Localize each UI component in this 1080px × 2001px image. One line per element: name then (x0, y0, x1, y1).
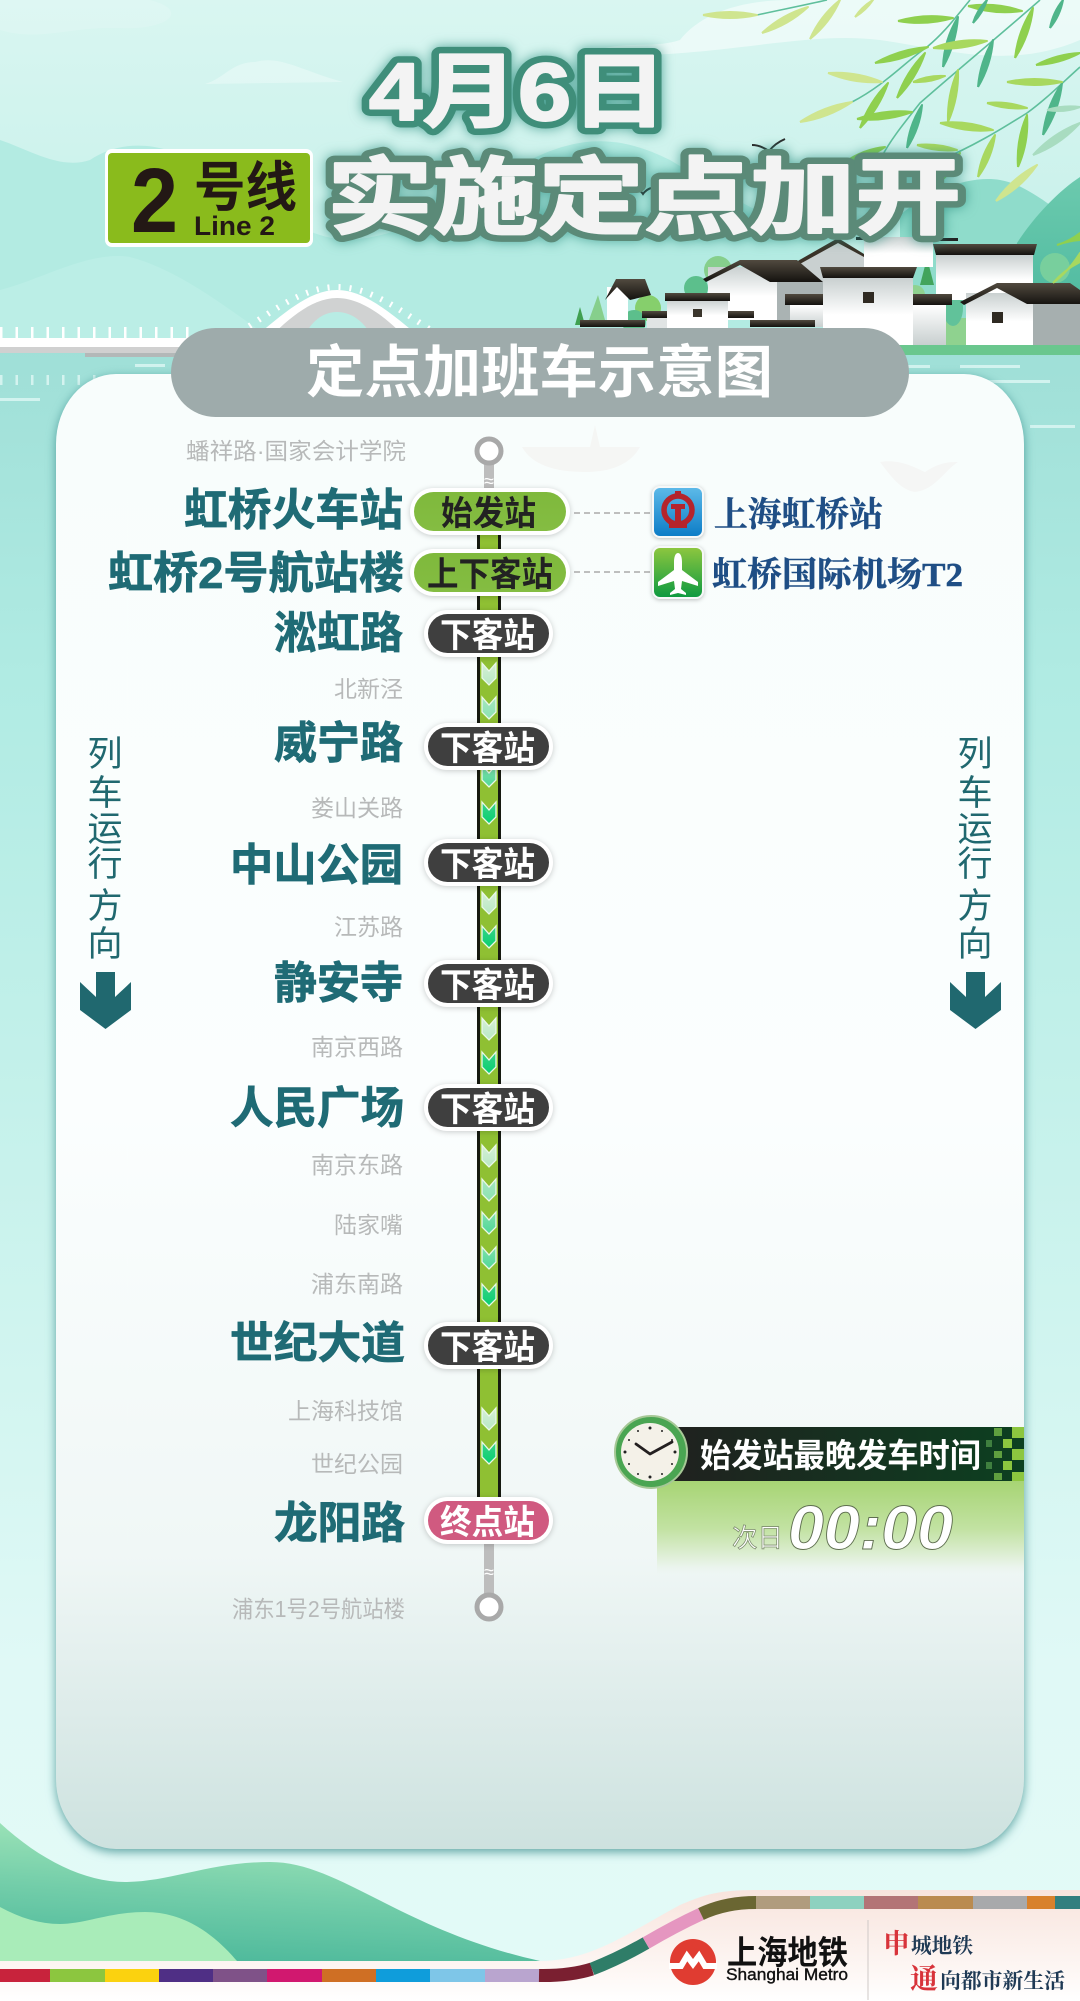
express station names: 虹桥火车站 (184, 486, 403, 535)
express station names: 威宁路 (274, 719, 403, 768)
background sky (0, 0, 1080, 345)
small station names: 北新泾 (334, 676, 403, 702)
pill: terminal: 终点站 (440, 1504, 535, 1542)
direction label left: 列 (87, 735, 123, 774)
last departure time panel (615, 1416, 1024, 1577)
background mountains (0, 140, 1080, 345)
metro line colour strip (0, 1902, 1080, 1976)
bridge (0, 287, 434, 357)
line 2 badge (105, 149, 313, 252)
dashed connectors (574, 513, 652, 572)
pill: alighting 1 (424, 610, 553, 657)
route line (477, 460, 501, 1598)
pill: alighting 3 (424, 839, 553, 886)
footer divider (867, 1920, 869, 2000)
express station names: 静安寺 (274, 959, 403, 1008)
faint boat and swallow (522, 425, 958, 492)
small station names: 南京西路 (311, 1034, 403, 1060)
route line: ≈ (484, 471, 494, 491)
express station names: 龙阳路 (274, 1499, 405, 1548)
express station names: 人民广场 (230, 1084, 404, 1133)
express station names (108, 486, 405, 1548)
pill: alighting 6 (424, 1322, 553, 1369)
panel heading: 始发站最晚发车时间 (700, 1437, 981, 1474)
background clouds (0, 0, 1080, 84)
direction label left: 向 (87, 925, 123, 964)
shanghai metro logo (669, 1934, 848, 1985)
pill: alighting 4: 下客站 (440, 967, 535, 1005)
footer band (0, 1890, 1080, 2001)
line 2 badge: 号线 (194, 158, 297, 218)
direction label left: 方 (87, 887, 123, 926)
title: subtitle: 实施定点加开 (327, 151, 961, 245)
pill: alighting 4 (424, 960, 553, 1007)
terminal ring top (477, 439, 501, 463)
direction label right: 向 (957, 925, 993, 964)
icon: airport (652, 546, 704, 599)
small station names: 浦东1号2号航站楼 (232, 1596, 405, 1622)
direction label right: 运 (957, 810, 993, 849)
time value: 00:00 (788, 1494, 953, 1563)
village houses (575, 230, 1080, 355)
direction label left: 行 (87, 845, 123, 884)
clock (615, 1416, 687, 1488)
water ripples (0, 364, 1075, 428)
small station names: 浦东南路 (311, 1271, 403, 1297)
pill: boarding and alighting: 上下客站 (427, 556, 553, 594)
pill: alighting 2 (424, 723, 553, 770)
direction label right: 方 (957, 887, 993, 926)
express station names: 中山公园 (230, 841, 403, 890)
title: date: 4月6日 (369, 47, 667, 138)
footer slogan: 城地铁 (911, 1934, 973, 1958)
direction label left (80, 735, 131, 1029)
footer slogan (883, 1929, 1065, 1995)
footer slogan: 申 (883, 1929, 910, 1959)
transfer label railway: 上海虹桥站 (714, 496, 883, 534)
direction label left: 车 (87, 774, 123, 813)
pill: alighting 5 (424, 1084, 553, 1131)
small station names: 南京东路 (311, 1152, 403, 1178)
header pill: 定点加班车示意图 (306, 341, 773, 405)
pill: alighting 3: 下客站 (440, 846, 535, 884)
footer slogan: 向都市新生活 (940, 1969, 1065, 1993)
route line: ≈ (484, 1562, 494, 1582)
pill: terminal (424, 1497, 553, 1544)
footer slogan: 通 (910, 1963, 938, 1995)
direction chevrons (482, 663, 496, 1464)
shanghai metro logo: 上海地铁 (727, 1934, 848, 1971)
line 2 badge: 2 (131, 150, 178, 252)
pill: alighting 1: 下客站 (440, 617, 535, 655)
direction label right: 车 (957, 774, 993, 813)
main panel (56, 374, 1024, 1849)
header pill (171, 328, 909, 417)
small station names: 世纪公园 (311, 1451, 403, 1477)
small station names: 娄山关路 (311, 795, 403, 821)
transfer label airport: 虹桥国际机场T2 (712, 556, 963, 594)
pill: departure (410, 488, 570, 535)
title: date: 4月6日 (369, 47, 667, 138)
small station names: 上海科技馆 (288, 1398, 403, 1424)
express station names: 淞虹路 (274, 609, 403, 658)
express station names: 世纪大道 (230, 1319, 405, 1368)
next day label: 次日 (732, 1523, 783, 1553)
direction label right: 列 (957, 735, 993, 774)
pill: alighting 5: 下客站 (440, 1091, 535, 1129)
title: subtitle: 实施定点加开 (327, 151, 961, 245)
line 2 badge: Line 2 (194, 211, 275, 241)
small station names: 蟠祥路·国家会计学院 (186, 438, 406, 464)
pill: boarding and alighting (410, 549, 570, 596)
pill: alighting 2: 下客站 (440, 730, 535, 768)
fence reflection (0, 375, 100, 385)
terminal ring bottom (477, 1595, 501, 1619)
direction label right: 行 (957, 845, 993, 884)
small station names: 陆家嘴 (334, 1212, 403, 1238)
direction label left: 运 (87, 810, 123, 849)
small station names: 江苏路 (334, 914, 403, 940)
pill: departure: 始发站 (441, 495, 536, 533)
birds (634, 139, 785, 194)
bottom hills (0, 1823, 540, 1961)
shanghai metro logo: Shanghai Metro (726, 1965, 848, 1984)
pill: alighting 6: 下客站 (440, 1329, 535, 1367)
express station names: 虹桥2号航站楼 (108, 549, 404, 598)
willow branches and leaves (703, 0, 1080, 283)
icon: railway (652, 486, 704, 538)
pixel pattern (986, 1427, 1024, 1481)
direction label right (950, 735, 1001, 1029)
station pills (410, 488, 570, 1544)
small station names (186, 438, 406, 1622)
